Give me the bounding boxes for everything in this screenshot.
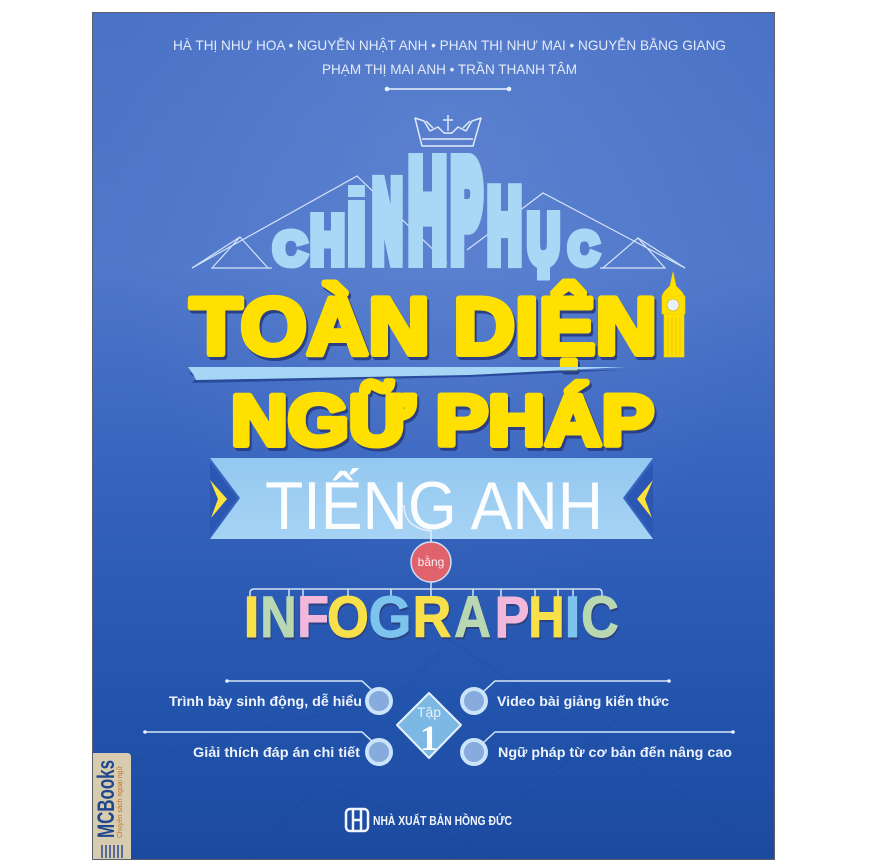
title: CHINH PHỤC: H [408, 132, 447, 289]
title: INFOGRAPHIC: O [327, 584, 369, 649]
volume badge: Tập 1: Tập [417, 704, 441, 720]
badge: bằng: bằng [418, 554, 444, 569]
publisher name: NHÀ XUẤT BẢN HỒNG ĐỨC [373, 813, 512, 828]
icon: left chevron [210, 480, 227, 518]
MCBooks tab [93, 753, 131, 859]
feature: Video bài giảng [462, 679, 671, 713]
feature: Giải thích đáp án: Giải thích đáp án chi tiết [193, 745, 361, 760]
authors: HÀ THỊ NHƯ HOA • NGUYỄN NHẬT ANH • PHAN THỊ NHƯ MAI • NGUYỄN BẰNG GIANG [173, 36, 726, 53]
publisher logo [346, 809, 368, 831]
feature: Ngữ pháp từ cơ bản [462, 730, 735, 764]
title: CHINH PHỤC: H [311, 204, 344, 278]
feature: Trình bày sinh động: Trình bày sinh động, dễ hiểu [169, 694, 362, 709]
title: CHINH PHỤC: H [488, 169, 521, 282]
connector: G to circle [404, 505, 431, 542]
title: CHINH PHỤC: I [347, 168, 366, 285]
title: INFOGRAPHIC: I [243, 585, 260, 650]
title: INFOGRAPHIC: H [528, 585, 565, 650]
authors: PHẠM THỊ MAI ANH • TRẦN THANH TÂM [322, 61, 577, 77]
MCBooks tab: Chuyên sách ngoại ngữ [115, 766, 124, 838]
title: CHINH PHỤC: C [273, 222, 307, 275]
title: INFOGRAPHIC: F [297, 584, 329, 650]
feature: Giải thích đáp án [143, 730, 391, 764]
icon: crown [415, 115, 481, 146]
title: INFOGRAPHIC: A [454, 585, 491, 650]
feature: Ngữ pháp từ cơ bản: Ngữ pháp từ cơ bản đến nâng cao [498, 745, 732, 760]
gap under the dot of the I [345, 197, 369, 200]
title: INFOGRAPHIC: R [413, 584, 451, 649]
title: INFOGRAPHIC: P [495, 584, 529, 650]
title: TOÀN DIỆN: TOÀN DIỆN [190, 281, 657, 372]
title: INFOGRAPHIC: I [564, 585, 581, 650]
title: NGỮ PHÁP: NGỮ PHÁP [231, 382, 654, 461]
roof line frame [192, 176, 685, 268]
volume badge: Tập 1: 1 [420, 718, 438, 758]
title: TIẾNG ANH: TIẾNG ANH [265, 467, 603, 544]
book cover background [92, 12, 774, 860]
title: INFOGRAPHIC: C [581, 584, 619, 650]
title: INFOGRAPHIC [243, 584, 619, 650]
banner ribbon [210, 458, 653, 539]
title: CHINH PHỤC: C [569, 224, 598, 274]
title: CHINH PHỤC: P [451, 133, 482, 287]
MCBooks tab: MCBooks [93, 760, 120, 838]
title: CHINH PHỤC: N [373, 162, 402, 282]
authors [173, 36, 726, 77]
ribbon arrow [188, 367, 625, 383]
icon: right chevron [637, 480, 653, 518]
title: CHINH PHỤC [273, 132, 598, 289]
feature: Trình bày sinh động [169, 679, 391, 713]
banner notch shading [210, 462, 653, 535]
letter connector tree [250, 582, 602, 598]
title: INFOGRAPHIC: G [369, 585, 411, 649]
badge: bằng [411, 542, 451, 582]
feature: Video bài giảng: Video bài giảng kiến thức [497, 694, 670, 709]
icon: Big Ben tower [662, 272, 685, 357]
volume badge: Tập 1 [397, 693, 461, 758]
authors underline [385, 87, 511, 91]
title: CHINH PHỤC: Ụ [528, 202, 559, 278]
title: INFOGRAPHIC: N [260, 585, 297, 650]
